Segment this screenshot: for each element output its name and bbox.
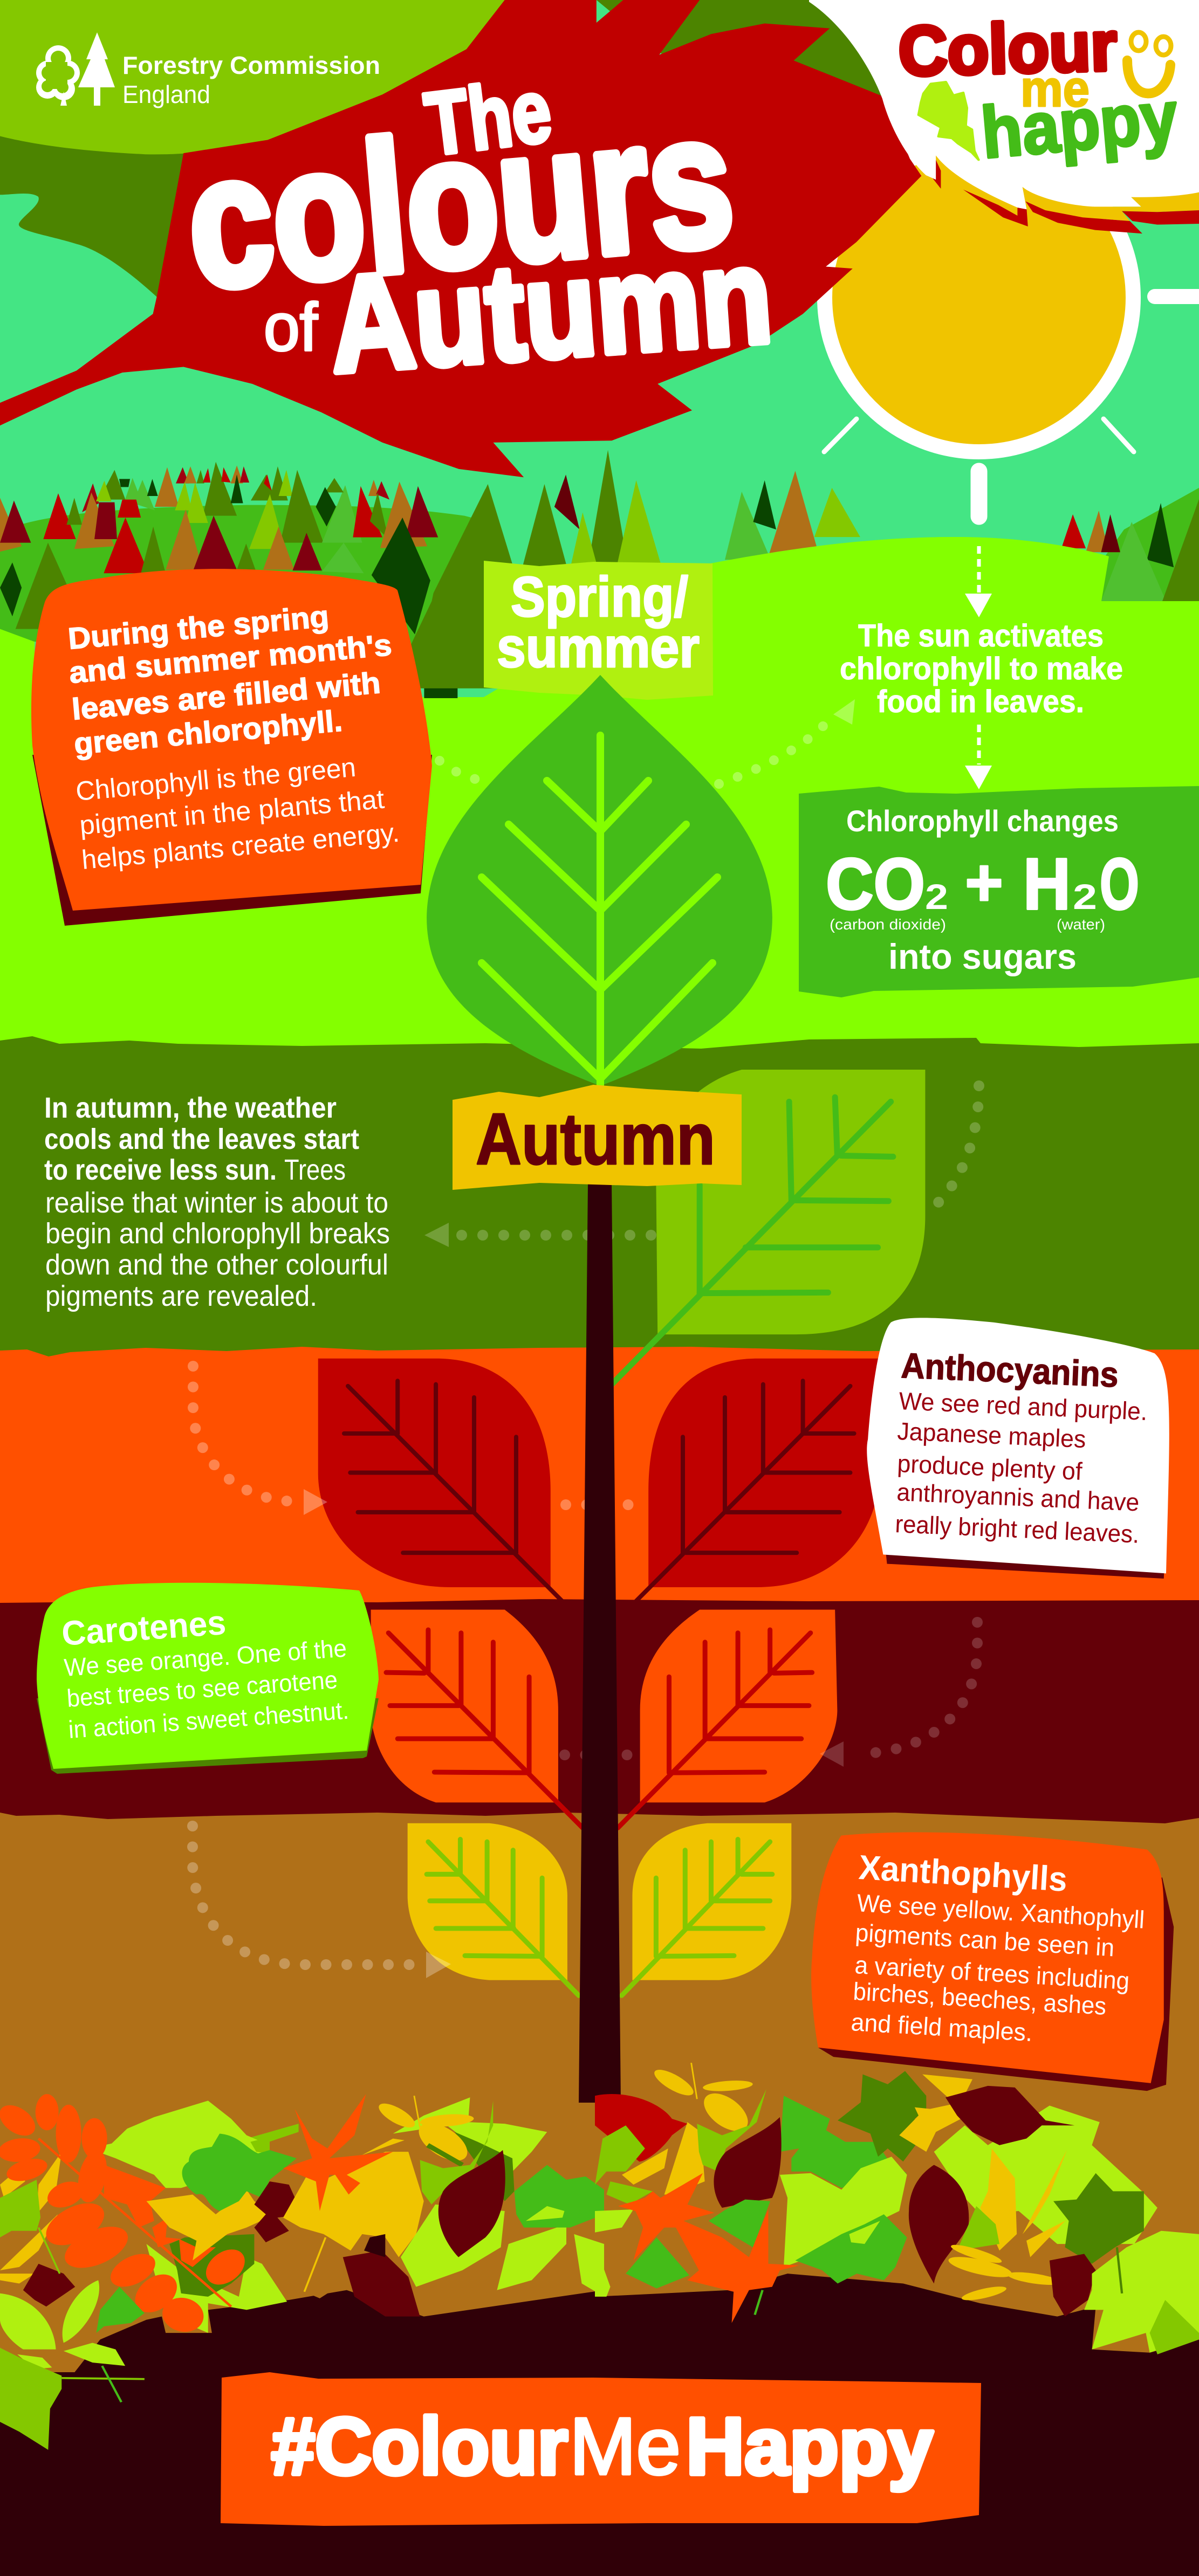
panel: carotenes [37, 1583, 379, 1774]
text: autumn explanation: begin and chlorophyll breaks [45, 1217, 390, 1250]
autumn leaf (lime) [612, 1070, 925, 1385]
hashtag banner: Happy [686, 2401, 933, 2491]
panel: chlorophyll changes formula: 2 [1073, 877, 1097, 917]
panel: chlorophyll changes formula: CO [826, 843, 925, 925]
red anthocyanin leaves [318, 1359, 879, 1601]
spring/summer sign text: Spring/ [511, 566, 688, 629]
panel: chlorophyll intro: helps plants create energy. [80, 817, 401, 875]
spring/summer leaf [427, 675, 772, 1094]
panel: xanthophylls: Xanthophylls [858, 1848, 1068, 1899]
title: colours [180, 75, 741, 328]
panel: chlorophyll changes formula [799, 786, 1199, 997]
hashtag banner [221, 2372, 981, 2526]
panel: chlorophyll intro: and summer month's [68, 628, 393, 690]
spring/summer sign background [484, 561, 713, 700]
panel: chlorophyll changes formula: into sugars [888, 936, 1077, 976]
title: Autumn [325, 219, 777, 401]
panel: anthocyanins [867, 1318, 1169, 1579]
title leaf [0, 0, 921, 477]
panel: chlorophyll intro: Chlorophyll is the green [74, 752, 357, 807]
icon: trees [36, 32, 115, 106]
panel: carotenes: in action is sweet chestnut. [67, 1696, 350, 1744]
Colour Me Happy logo: Colour [897, 6, 1118, 91]
autumn sign: Autumn [476, 1098, 715, 1180]
panel: chlorophyll changes formula: Chlorophyll changes [846, 804, 1119, 838]
text: autumn explanation [44, 1092, 390, 1312]
panel: chlorophyll changes formula: O [1100, 843, 1139, 925]
panel: xanthophylls [811, 1832, 1174, 2091]
dotted arrow: to red leaf [193, 1366, 629, 1515]
text: autumn explanation: In autumn, the weather [44, 1092, 337, 1124]
panel: xanthophylls: pigments can be seen in [854, 1918, 1115, 1962]
panel: chlorophyll changes formula: H [1023, 843, 1071, 925]
Colour Me Happy logo: me [1020, 60, 1090, 118]
panel: anthocyanins: produce plenty of [897, 1449, 1083, 1485]
icon: smiley [1127, 32, 1171, 93]
dotted arrow: leaf to sun text [440, 699, 855, 784]
bright green hill in front of treeline [484, 537, 1199, 701]
hashtag banner: #Colour [271, 2401, 568, 2491]
text: autumn explanation: to receive less sun. [44, 1154, 277, 1186]
text: autumn explanation: Trees [284, 1154, 346, 1186]
text: sun activates chlorophyll [840, 618, 1123, 719]
text: autumn explanation: pigments are revealed. [45, 1280, 317, 1312]
panel: chlorophyll intro: During the spring [67, 599, 330, 656]
autumn sign [453, 1085, 742, 1190]
panel: chlorophyll intro: pigment in the plants that [78, 784, 386, 841]
panel: xanthophylls: a variety of trees including [854, 1951, 1131, 1995]
text: autumn explanation: realise that winter is about to [45, 1187, 388, 1219]
panel: chlorophyll changes formula: (carbon dioxide) [830, 916, 946, 933]
panel: chlorophyll changes formula: (water) [1057, 916, 1105, 933]
text: autumn explanation: down and the other colourful [45, 1249, 388, 1281]
panel: anthocyanins: anthroyannis and have [896, 1478, 1140, 1517]
trunk [579, 1183, 621, 2103]
panel: anthocyanins: Japanese maples [897, 1417, 1086, 1453]
text: sun activates chlorophyll: chlorophyll to make [840, 651, 1123, 686]
top hills behind title leaf [0, 0, 883, 302]
leaf pile: left half [0, 2094, 604, 2576]
icon: oak leaf [919, 82, 978, 160]
dotted arrow: autumn leaf to text [424, 1086, 979, 1247]
panel: chlorophyll intro: green chlorophyll. [73, 704, 344, 761]
text: autumn explanation: cools and the leaves start [44, 1123, 359, 1155]
orange carotene leaves [371, 1610, 837, 1828]
dotted arrow: to orange leaf [565, 1622, 977, 1767]
Colour Me Happy logo: happy [978, 75, 1181, 174]
centre and right treeline [390, 450, 1199, 688]
panel: chlorophyll changes formula: 2 [925, 877, 948, 917]
panel: anthocyanins: really bright red leaves. [895, 1510, 1140, 1548]
Forestry Commission logo [36, 32, 380, 108]
title: of [264, 290, 318, 365]
panel: anthocyanins: Anthocyanins [900, 1345, 1119, 1395]
panel: carotenes: We see orange. One of the [63, 1634, 347, 1682]
panel: chlorophyll intro [31, 569, 432, 926]
title [180, 60, 777, 401]
left forest treeline [0, 462, 485, 698]
Forestry Commission logo: Forestry Commission [122, 51, 380, 79]
sun dotted arrow 2 [965, 725, 992, 789]
icon: sun with rays [824, 143, 1199, 516]
panel: anthocyanins: We see red and purple. [899, 1387, 1148, 1425]
hashtag banner: Me [570, 2401, 681, 2491]
title: The [420, 60, 557, 174]
panel: carotenes: Carotenes [60, 1603, 227, 1653]
panel: chlorophyll intro: leaves are filled with [71, 665, 382, 726]
text: sun activates chlorophyll: food in leaves. [877, 684, 1084, 719]
Colour Me Happy logo [809, 0, 1199, 233]
panel: chlorophyll changes formula: + [965, 845, 1003, 920]
panel: xanthophylls: We see yellow. Xanthophyll [856, 1889, 1146, 1934]
panel: xanthophylls: and field maples. [850, 2008, 1033, 2047]
dotted arrow: to yellow leaf [193, 1826, 451, 1978]
Forestry Commission logo: England [122, 80, 210, 108]
spring/summer sign text: summer [497, 616, 700, 679]
panel: xanthophylls: birches, beeches, ashes [852, 1977, 1107, 2020]
sun dotted arrow 1 [965, 546, 992, 617]
leaf pile: right half [595, 2063, 1199, 2576]
logo torn background [809, 0, 1199, 233]
panel: carotenes: best trees to see carotene [66, 1665, 338, 1712]
spring/summer sign text [497, 566, 700, 679]
text: sun activates chlorophyll: The sun activates [858, 618, 1104, 653]
yellow xanthophyll leaves [408, 1823, 791, 1995]
